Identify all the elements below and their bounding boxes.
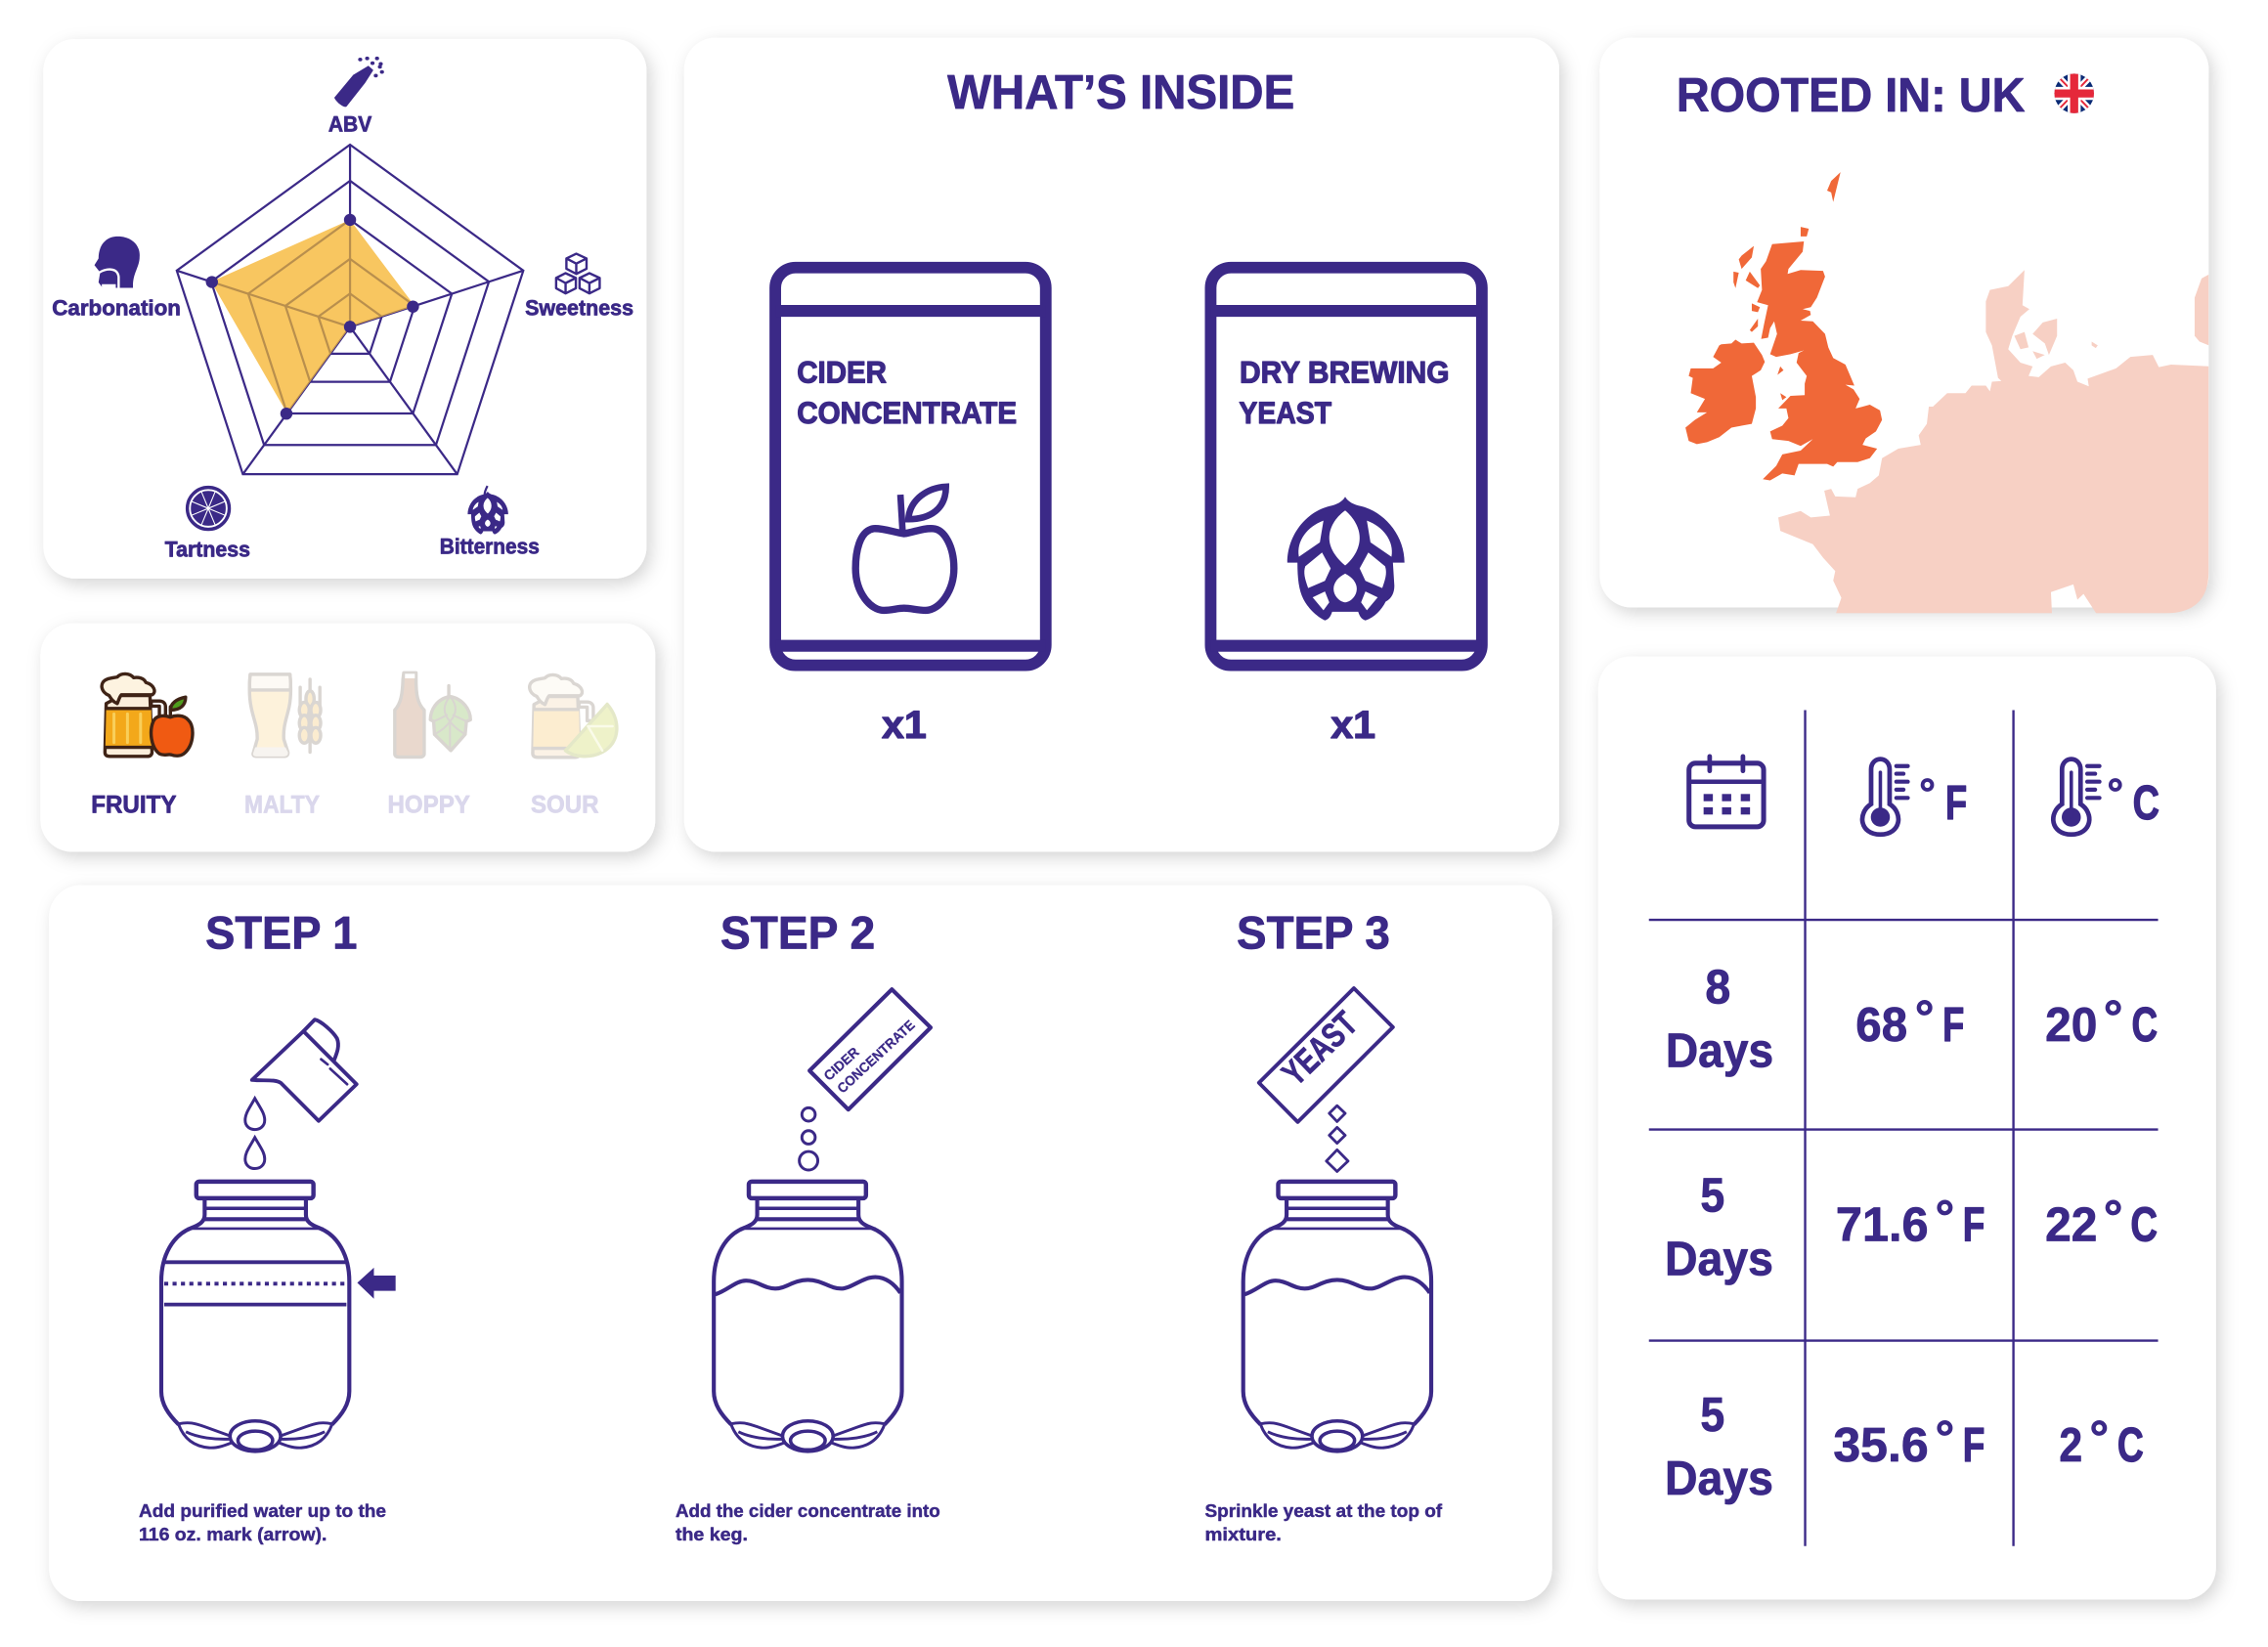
panel: flavour types [40,624,655,852]
row 3: duration: 5 [1700,1389,1724,1442]
step 2 [676,908,940,1544]
instruction: step 2: Add the cider concentrate into [676,1500,940,1521]
label: FRUITY: FRUITY [91,792,177,819]
instruction: step 1: Add purified water up to the [139,1500,386,1521]
label: SOUR: SOUR [531,792,599,819]
row 1: Celsius: ° [2104,991,2122,1044]
icon: faded mug and lime [530,674,617,758]
panel: flavour radar [43,39,646,579]
row 3: duration: Days [1665,1452,1773,1505]
step 3 [1204,908,1443,1544]
row 2: duration: Days [1665,1233,1773,1285]
label: HOPPY: HOPPY [388,792,470,819]
icon: yeast packet [1259,988,1393,1122]
icon: cider concentrate packet: CIDER [820,1044,862,1084]
row 1: Fahrenheit: ° [1915,991,1934,1044]
row 2: duration: 5 [1700,1170,1724,1223]
icon: yeast granules [1327,1105,1348,1171]
panel: what's inside [684,37,1559,852]
row 3: Fahrenheit: ° [1936,1411,1954,1464]
label: Tartness: Tartness [165,538,250,562]
icon: UK flag [2054,72,2094,114]
row 2: Fahrenheit: 71.6 [1836,1199,1929,1252]
label: Carbonation: Carbonation [52,296,181,321]
step 1 [139,908,396,1544]
keg with water mark [161,1182,349,1452]
icon: champagne bottle [334,57,384,107]
instruction: step 1: 116 oz. mark (arrow). [139,1524,327,1544]
header: Fahrenheit [1862,759,1967,835]
pack: dry brewing yeast [1210,268,1482,666]
instruction: step 2: the keg. [676,1524,748,1544]
header: Celsius [2053,759,2159,835]
heading: step 3: STEP 3 [1237,908,1390,960]
pack text: dry brewing yeast: DRY BREWING [1240,354,1450,389]
panel: fermentation schedule table [1598,657,2216,1599]
label: MALTY: MALTY [244,792,320,819]
label: Bitterness: Bitterness [440,535,540,559]
row 2: duration [1665,1170,1773,1285]
panel: brewing steps [49,886,1552,1601]
icon: apple [855,487,954,610]
pack: cider concentrate [775,268,1046,666]
icon: cider concentrate packet [809,989,931,1109]
label: Sweetness: Sweetness [525,296,633,321]
row 2: Celsius: C [2130,1199,2158,1252]
quantity: yeast x1: x1 [1330,704,1375,747]
map: continental Europe [1778,270,2211,619]
icon: faded pint and wheat [249,674,321,757]
row 2: Fahrenheit: ° [1936,1192,1954,1244]
row 1: Fahrenheit: 68 [1855,999,1907,1052]
row 1: Fahrenheit [1855,991,1964,1052]
pack text: dry brewing yeast [1239,354,1450,430]
icon: cider concentrate packet: CONCENTRATE [834,1017,918,1096]
row 2: Celsius: 22 [2045,1199,2097,1252]
instruction: step 3 [1204,1500,1443,1544]
row 3: Fahrenheit: 35.6 [1833,1419,1929,1472]
heading: what's inside: WHAT’S INSIDE [947,66,1294,119]
instruction: step 1 [139,1500,386,1544]
icon: faded bottle and hop [395,672,470,757]
row 3: Celsius: 2 [2059,1419,2082,1472]
icon: thermometer F [1862,759,1908,835]
row 1: Celsius: C [2131,999,2158,1052]
pack text: cider concentrate: CIDER [797,354,887,389]
icon: calendar [1689,757,1764,827]
heading: step 2: STEP 2 [720,908,875,960]
row 3: Celsius: ° [2090,1411,2109,1464]
row 1: duration [1666,962,1773,1077]
row 1: duration: Days [1666,1024,1773,1077]
header: Celsius: ° [2107,771,2123,816]
heading: rooted in UK: ROOTED IN: UK [1677,69,2025,122]
instruction: step 2 [676,1500,940,1544]
icon: head and throat [95,237,140,288]
header: Fahrenheit: F [1945,777,1967,830]
row 1: Fahrenheit: F [1942,999,1964,1052]
pack text: dry brewing yeast: YEAST [1239,395,1332,430]
row 2: Fahrenheit [1836,1192,1984,1252]
row 2: Celsius [2045,1192,2158,1252]
row 2: Fahrenheit: F [1963,1199,1984,1252]
row 1: duration: 8 [1705,962,1730,1015]
row 3: duration [1665,1389,1773,1505]
keg with liquid [714,1182,902,1452]
map: United Kingdom and Ireland [1685,172,1882,480]
heading: step 1: STEP 1 [205,908,357,960]
row 2: Celsius: ° [2104,1192,2122,1244]
icon: measuring jug [252,1019,357,1121]
panel: rooted in UK [1599,37,2211,619]
label: ABV: ABV [328,112,371,137]
icon: filled hop [467,486,508,535]
pack text: cider concentrate: CONCENTRATE [797,395,1017,430]
quantity: cider x1: x1 [882,704,927,747]
header: Celsius: C [2133,777,2159,830]
icon: beer mug and apple [102,673,193,757]
icon: water drops [245,1099,265,1169]
row 3: Fahrenheit [1833,1411,1984,1472]
icon: sugar cubes [556,254,599,293]
icon: concentrate drops [800,1107,818,1170]
icon: yeast packet: YEAST [1274,1004,1365,1093]
radar chart [177,145,523,474]
row 1: Celsius: 20 [2045,999,2097,1052]
keg with liquid [1243,1182,1431,1452]
arrow: fill mark [357,1268,396,1299]
icon: citrus slice [188,488,230,530]
header: Fahrenheit: ° [1919,771,1936,816]
row 3: Celsius [2059,1411,2144,1472]
pack text: cider concentrate [797,354,1017,430]
row 3: Fahrenheit: F [1963,1419,1984,1472]
icon: hop outline [1287,497,1405,621]
row 3: Celsius: C [2117,1419,2144,1472]
row 1: Celsius [2045,991,2158,1052]
icon: thermometer C [2053,759,2100,835]
instruction: step 3: mixture. [1204,1524,1282,1544]
instruction: step 3: Sprinkle yeast at the top of [1204,1500,1443,1521]
